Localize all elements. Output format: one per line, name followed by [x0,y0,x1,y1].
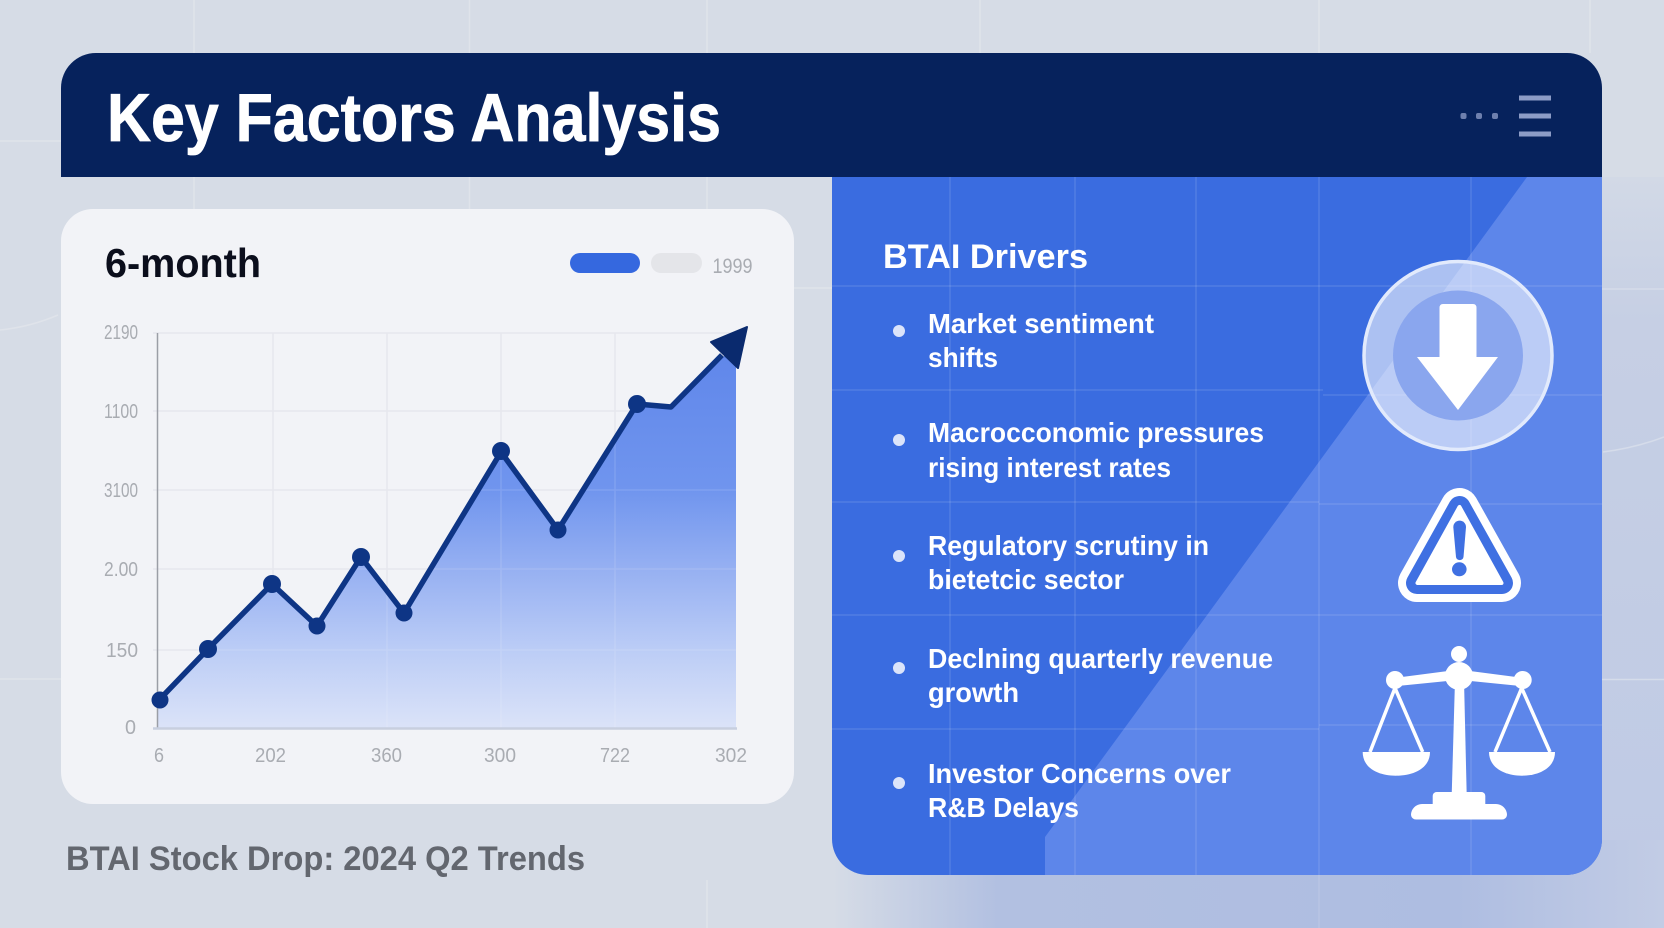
x-axis labels: 6 [154,745,164,767]
panel shadow: right [1560,177,1664,897]
panel shadow: bottom [832,840,1664,928]
bullet: declining revenue [893,643,1273,708]
area fill [158,345,736,728]
x-axis labels [154,745,747,767]
data points [152,395,646,708]
x-axis labels: 300 [484,745,516,767]
x-axis labels: 202 [255,745,286,767]
bullet: market sentiment: shifts [928,342,998,373]
caption: BTAI Stock Drop: 2024 Q2 Trends [66,840,585,878]
y-axis labels: 0 [125,717,136,739]
icon: warning triangle [1417,507,1502,583]
title: Key Factors Analysis [107,80,721,156]
exclamation mark [1452,521,1467,576]
right margin lines [1602,289,1664,680]
bullet: macroeconomic pressures: rising interest rates [928,452,1171,483]
x-axis labels: 360 [371,745,402,767]
price line [159,355,722,700]
bullet: investor concerns: Investor Concerns over [928,758,1231,789]
bullet: investor concerns: R&B Delays [928,792,1079,823]
bullet: market sentiment: Market sentiment [928,308,1154,339]
line chart [104,322,747,767]
chart title: 6-month [105,240,261,286]
icon: down arrow in circle [1364,262,1552,450]
panel: chart card [61,209,794,804]
y-axis labels: 2.00 [104,559,138,581]
icon: balance scales [1363,646,1555,820]
x-axis labels: 302 [715,745,747,767]
bullet: investor concerns [893,758,1231,823]
bullet: market sentiment [893,308,1154,373]
bullet: regulatory scrutiny: bietetcic sector [928,564,1124,595]
panel: BTAI drivers [832,177,1602,875]
arrow head [711,327,747,368]
y-axis labels: 3100 [104,480,138,502]
header menu dots [1460,113,1498,119]
bullet: declining revenue: growth [928,677,1019,708]
header bar [61,53,1602,177]
bullet: regulatory scrutiny [893,530,1209,595]
y-axis labels: 2190 [104,322,138,344]
y-axis labels [104,322,138,739]
bullet: declining revenue: Declning quarterly revenue [928,643,1273,674]
x-axis labels: 722 [600,745,630,767]
header menu icon [1519,96,1551,136]
y-axis labels: 1100 [104,401,138,423]
legend [570,253,752,278]
panel heading: BTAI Drivers [883,238,1088,276]
bullet: macroeconomic pressures [893,417,1264,483]
legend: 1999 [712,255,752,278]
y-axis labels: 150 [106,640,138,662]
bullet: macroeconomic pressures: Macrocconomic pressures [928,417,1264,448]
bullet: regulatory scrutiny: Regulatory scrutiny in [928,530,1209,561]
